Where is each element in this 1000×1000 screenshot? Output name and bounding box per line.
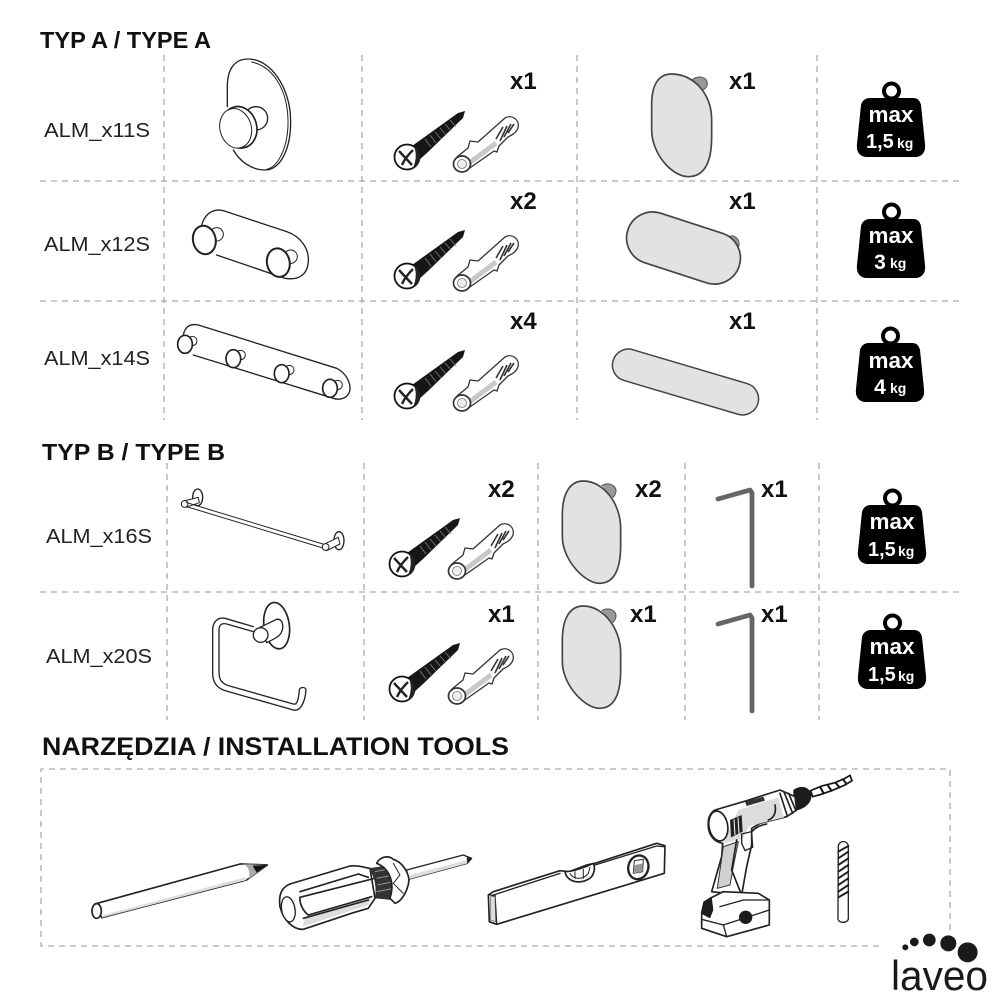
icon: adhesive pad <box>562 481 621 583</box>
icon: adhesive pad <box>620 205 747 291</box>
icon: four hook rail <box>178 325 350 399</box>
row: ALM_x11S <box>44 59 925 177</box>
icon: weight limit: max <box>870 634 915 659</box>
count: screws: x2 <box>510 188 537 215</box>
icon: double hook <box>190 210 308 279</box>
count: pad: x1 <box>630 601 657 628</box>
row: ALM_x14S <box>44 308 924 419</box>
icon: adhesive pad <box>562 606 621 708</box>
panel: installation tools <box>41 769 950 946</box>
icon: weight limit <box>857 204 925 278</box>
icon: towel bar <box>181 489 344 551</box>
grid: dashed separators <box>40 55 962 720</box>
row: ALM_x12S <box>44 188 925 291</box>
icon: weight limit: kg <box>890 255 906 271</box>
icon: weight limit: 1,5 <box>868 539 896 561</box>
icon: drill bit <box>838 841 848 922</box>
label: ALM_x11S: ALM_x11S <box>44 120 150 142</box>
icon: weight limit <box>858 490 926 564</box>
icon: weight limit: kg <box>890 380 906 396</box>
icon: logo dots <box>902 934 978 962</box>
count: screws: x4 <box>510 308 537 335</box>
icon: weight limit: kg <box>897 135 913 151</box>
count: hex key: x1 <box>761 601 788 628</box>
heading: installation tools: NARZĘDZIA / INSTALLATION TOOLS <box>42 733 509 761</box>
logo wordmark: laveo <box>891 952 988 999</box>
heading: type B: TYP B / TYPE B <box>42 439 225 465</box>
icon: screw and wall plug <box>390 643 513 704</box>
count: screws: x1 <box>488 601 515 628</box>
icon: hex key <box>718 615 752 711</box>
icon: cordless drill <box>701 775 852 937</box>
icon: spirit level <box>488 843 665 924</box>
logo: laveo <box>891 934 988 999</box>
icon: screw and wall plug <box>394 350 518 411</box>
icon: weight limit: max <box>868 348 914 373</box>
icon: pencil <box>92 864 267 918</box>
heading: type A: TYP A / TYPE A <box>40 27 211 53</box>
count: screws: x1 <box>510 68 537 95</box>
icon: adhesive pad <box>609 345 762 419</box>
icon: hex key <box>718 490 752 586</box>
icon: adhesive pad <box>652 74 712 177</box>
icon: screw and wall plug <box>390 518 513 579</box>
icon: screwdriver <box>280 855 472 929</box>
icon: single hook <box>215 59 291 170</box>
icon: weight limit: kg <box>898 543 914 559</box>
count: pad: x2 <box>635 476 662 503</box>
label: ALM_x16S: ALM_x16S <box>46 526 152 548</box>
icon: weight limit <box>857 84 925 157</box>
icon: weight limit: 3 <box>874 251 886 274</box>
icon: weight limit: max <box>870 509 915 534</box>
row: ALM_x16S <box>46 476 926 586</box>
count: hex key: x1 <box>761 476 788 503</box>
icon: weight limit: max <box>868 223 914 248</box>
icon: weight limit: max <box>868 102 914 127</box>
label: ALM_x20S: ALM_x20S <box>46 646 152 668</box>
count: pad: x1 <box>729 308 756 335</box>
icon: weight limit <box>858 616 926 689</box>
count: pad: x1 <box>729 68 756 95</box>
icon: toilet roll holder <box>213 601 306 710</box>
icon: weight limit: kg <box>898 668 914 684</box>
icon: weight limit: 1,5 <box>866 131 894 153</box>
count: screws: x2 <box>488 476 515 503</box>
label: ALM_x14S: ALM_x14S <box>44 348 150 370</box>
icon: weight limit: 1,5 <box>868 664 896 686</box>
label: ALM_x12S: ALM_x12S <box>44 234 150 256</box>
icon: screw and wall plug <box>394 230 518 291</box>
row: ALM_x20S <box>46 601 926 711</box>
icon: weight limit: 4 <box>874 376 886 399</box>
count: pad: x1 <box>729 188 756 215</box>
icon: screw and wall plug <box>394 111 518 172</box>
icon: weight limit <box>856 328 924 402</box>
